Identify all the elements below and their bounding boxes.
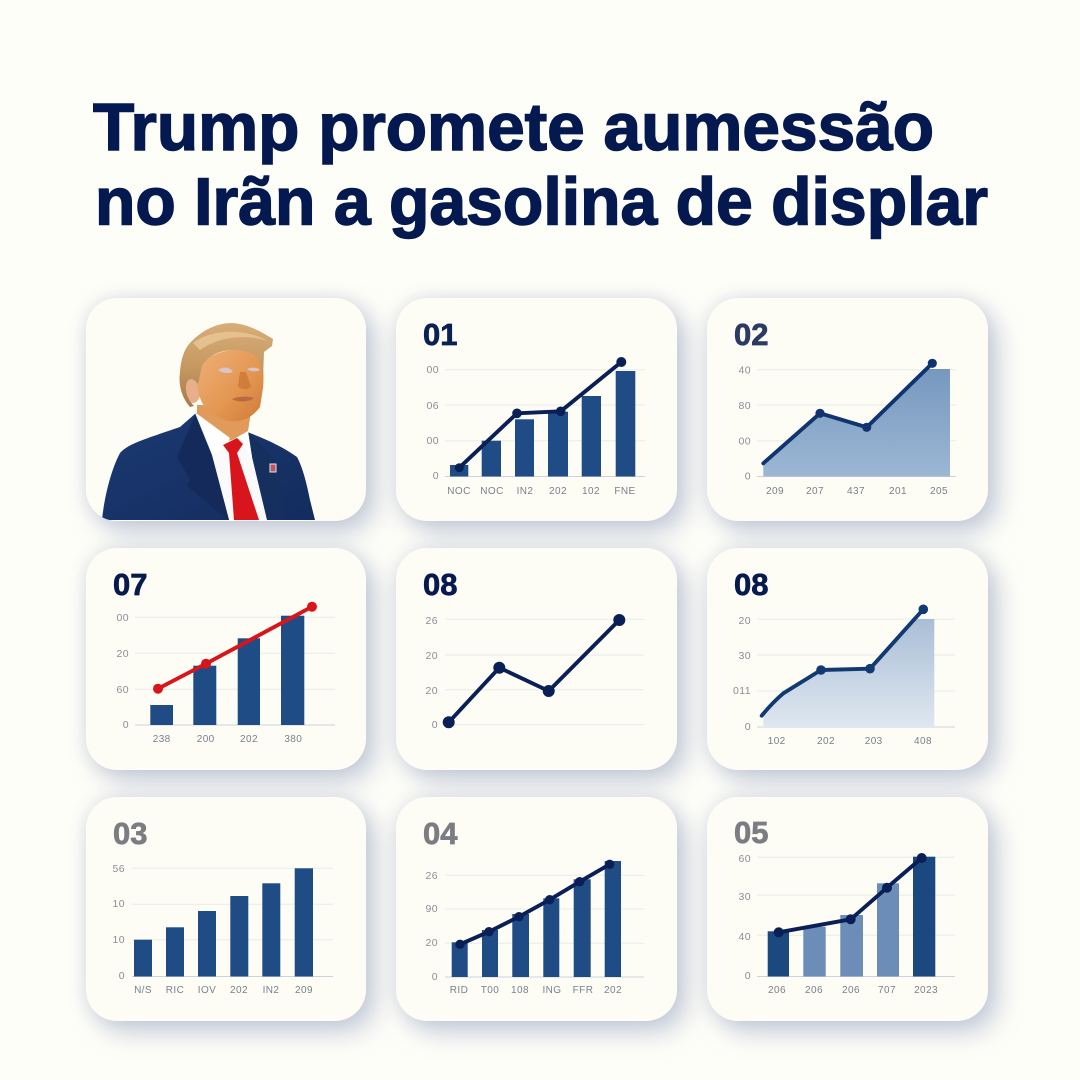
panel: chart 02 [707, 298, 988, 521]
area chart 02: 437 [847, 486, 865, 497]
combo chart 04: 0 [432, 971, 438, 983]
area chart 08: 408 [914, 736, 932, 747]
combo chart 05: 0 [745, 970, 751, 982]
panel: chart 08 area [707, 548, 988, 770]
combo chart 07: 00 [117, 612, 129, 624]
area chart 02: 209 [766, 486, 784, 497]
combo chart 04 [426, 860, 644, 996]
area chart 08: 0 [745, 721, 751, 733]
mouth [232, 397, 254, 402]
portrait illustration [102, 323, 315, 520]
shirt [195, 413, 267, 520]
number 03: 03 [113, 816, 147, 851]
combo chart 07: 20 [117, 648, 129, 660]
number 05: 05 [734, 815, 768, 850]
tie [223, 438, 259, 520]
combo chart 04: 26 [426, 870, 438, 882]
jacket [102, 413, 315, 520]
combo chart 05: 60 [739, 853, 751, 865]
combo chart 01: 00 [427, 364, 439, 376]
combo chart 05: 206 [842, 985, 860, 996]
number 04: 04 [423, 816, 458, 851]
bar chart 03: 56 [113, 863, 125, 875]
combo chart 07: 380 [284, 734, 302, 745]
bar chart 03: 10 [113, 898, 125, 910]
area chart 02 [739, 359, 956, 497]
right lapel [249, 433, 284, 520]
combo chart 04: 202 [604, 985, 622, 996]
nose [238, 372, 251, 389]
left lapel [177, 415, 229, 520]
combo chart 05: 40 [739, 931, 751, 943]
area chart 02: 201 [889, 486, 907, 497]
panel: chart 05 [707, 797, 988, 1021]
area chart 02: 80 [739, 400, 751, 412]
combo chart 01: 202 [549, 486, 567, 497]
number 02: 02 [734, 317, 768, 352]
bar chart 03: 209 [295, 985, 313, 996]
combo chart 01: 00 [427, 435, 439, 447]
bar chart 03 [113, 863, 333, 996]
combo chart 01 [427, 357, 645, 497]
number 01: 01 [423, 317, 457, 352]
combo chart 01: NOC [480, 486, 504, 497]
hair [179, 323, 273, 407]
combo chart 01: 0 [433, 470, 439, 482]
line chart 08: 0 [432, 719, 438, 731]
title: Trump promete aumessão [93, 90, 934, 165]
area chart 08: 20 [739, 615, 751, 627]
eyes [218, 368, 260, 373]
bar chart 03: 202 [230, 985, 248, 996]
line chart 08: 20 [426, 650, 438, 662]
number 08: 08 [734, 567, 768, 602]
lapel pin [270, 464, 276, 472]
combo chart 01: IN2 [517, 486, 533, 497]
bar chart 03: IN2 [263, 985, 279, 996]
area chart 08 [733, 604, 955, 747]
bar chart 03: 0 [119, 970, 125, 982]
panel: chart 04 [396, 797, 677, 1021]
panel: chart 01 [396, 298, 677, 521]
panel: portrait [86, 298, 366, 521]
combo chart 04: T00 [481, 985, 499, 996]
number 08: 08 [423, 567, 457, 602]
bar chart 03: IOV [198, 985, 216, 996]
face [197, 349, 263, 421]
number 07: 07 [113, 567, 147, 602]
combo chart 07: 238 [153, 734, 171, 745]
panel: chart 07 [86, 548, 366, 770]
combo chart 04: 90 [426, 903, 438, 915]
collar [196, 413, 252, 457]
line chart 08: 20 [426, 685, 438, 697]
combo chart 04: 108 [511, 985, 529, 996]
bar chart 03: RIC [166, 985, 184, 996]
area chart 02: 00 [739, 436, 751, 448]
line chart 08 [426, 614, 644, 731]
combo chart 01: NOC [447, 486, 471, 497]
line chart 08: 26 [426, 615, 438, 627]
title [93, 90, 988, 240]
area chart 08: 102 [768, 736, 786, 747]
combo chart 07: 202 [240, 734, 258, 745]
combo chart 01: FNE [614, 486, 636, 497]
panel: chart 08 line [396, 548, 677, 770]
combo chart 05: 30 [739, 891, 751, 903]
area chart 02: 0 [745, 470, 751, 482]
combo chart 05 [739, 853, 955, 996]
combo chart 05: 206 [768, 985, 786, 996]
area chart 08: 30 [739, 650, 751, 662]
area chart 02: 205 [930, 486, 948, 497]
bar chart 03: N/S [134, 985, 152, 996]
area chart 08: 011 [733, 685, 751, 697]
combo chart 04: ING [543, 985, 561, 996]
combo chart 05: 2023 [914, 985, 938, 996]
area chart 02: 40 [739, 364, 751, 376]
panel: chart 03 [86, 797, 366, 1021]
hair highlight [193, 332, 268, 350]
combo chart 04: RID [450, 985, 468, 996]
combo chart 07 [117, 602, 335, 745]
area chart 08: 203 [865, 736, 883, 747]
combo chart 04: FFR [573, 985, 593, 996]
ear [185, 377, 201, 403]
combo chart 05: 206 [805, 985, 823, 996]
combo chart 04: 20 [426, 937, 438, 949]
combo chart 07: 60 [117, 684, 129, 696]
combo chart 01: 06 [427, 400, 439, 412]
bar chart 03: 10 [113, 934, 125, 946]
title: no Irãn a gasolina de displar [95, 164, 988, 240]
area chart 02: 207 [806, 486, 824, 497]
combo chart 05: 707 [878, 985, 896, 996]
combo chart 07: 0 [123, 719, 129, 731]
area chart 08: 202 [817, 736, 835, 747]
combo chart 01: 102 [582, 486, 600, 497]
combo chart 07: 200 [197, 734, 215, 745]
neck [197, 405, 252, 444]
